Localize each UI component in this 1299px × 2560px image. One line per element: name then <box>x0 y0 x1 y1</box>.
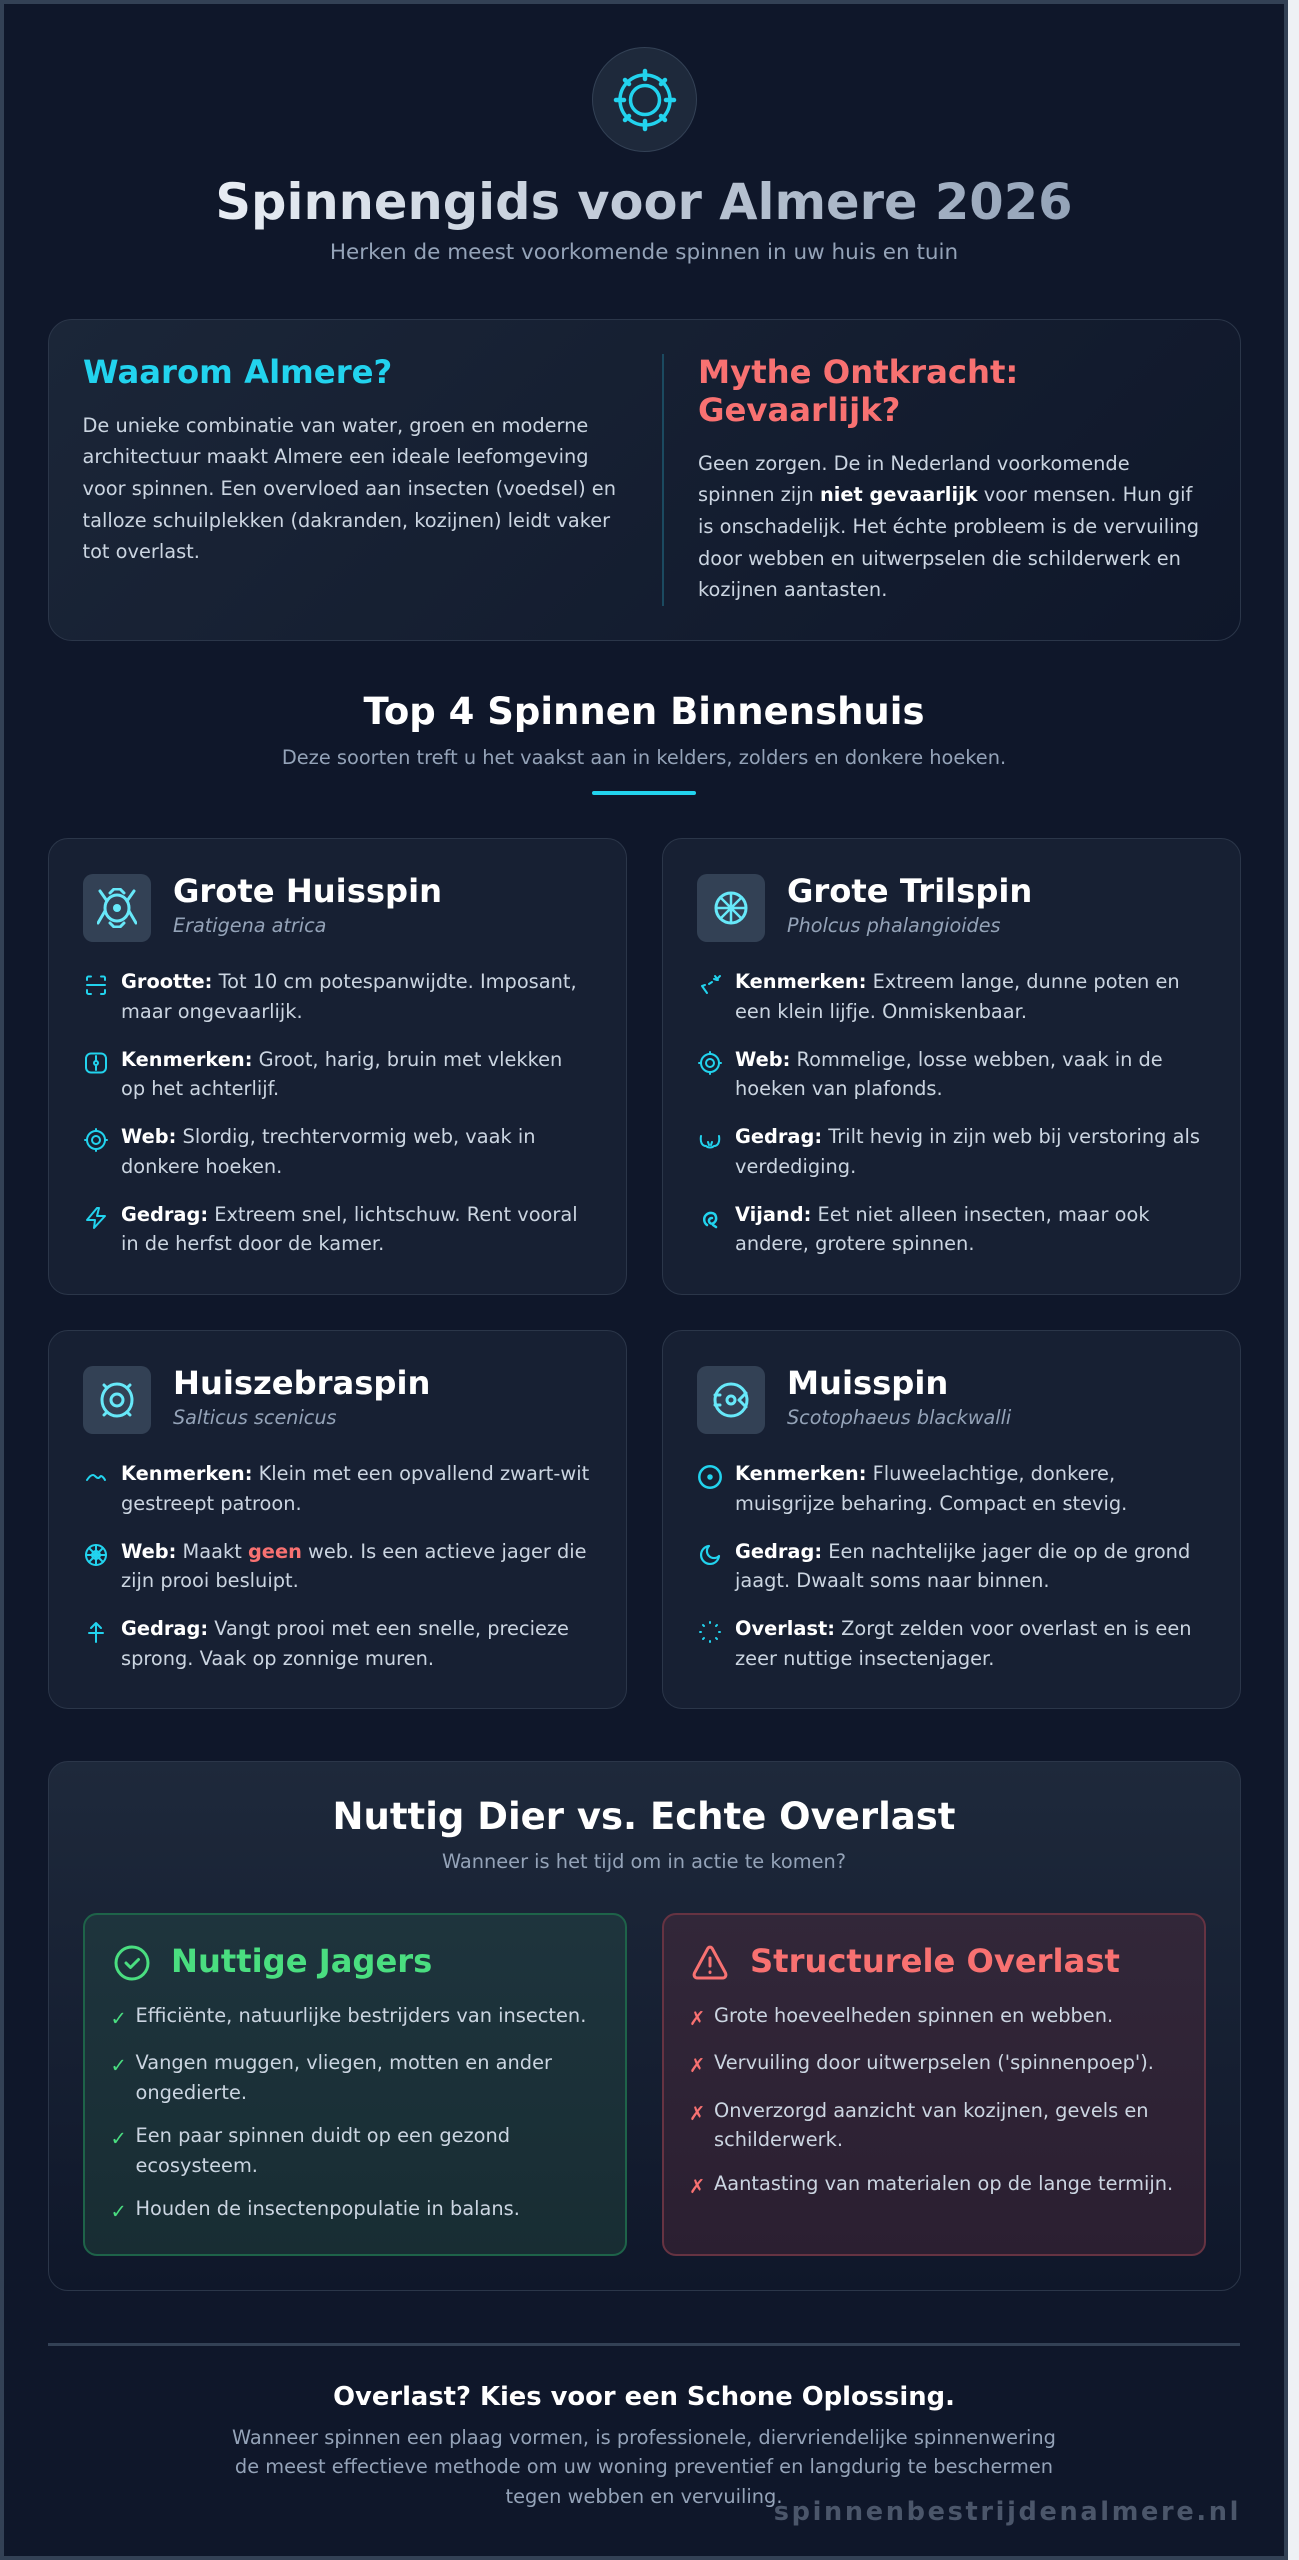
box: nuttige jagers: ✓ <box>110 2007 127 2030</box>
item: gedrag <box>700 1540 1190 1592</box>
box: structurele overlast: ✗ <box>689 2054 705 2077</box>
list item: Efficiënte, natuurlijke bestrijders van insecten. <box>136 2004 586 2027</box>
list item: Aantasting van materialen op de lange termijn. <box>714 2172 1173 2194</box>
list item: Grote hoeveelheden spinnen en webben. <box>714 2004 1113 2027</box>
icon box: trilspin <box>697 874 765 942</box>
item: gedrag <box>700 1125 1200 1178</box>
item: grootte: maar ongevaarlijk. <box>121 1000 303 1023</box>
list item: Een paar spinnen duidt op een gezond <box>136 2124 510 2147</box>
item: gedrag: Gedrag: Een nachtelijke jager die op de grond <box>735 1540 1190 1562</box>
item: kenmerken <box>86 1462 589 1515</box>
text: waarom almere: tot overlast. <box>82 540 200 563</box>
item: vijand: andere, grotere spinnen. <box>735 1232 974 1255</box>
footer heading: Overlast? Kies voor een Schone Oplossing. <box>333 2382 955 2412</box>
list item <box>689 2098 1149 2151</box>
item: grootte <box>86 970 577 1023</box>
list item <box>110 2051 552 2104</box>
heading: mythe ontkracht: Mythe Ontkracht: <box>698 353 1018 391</box>
text: waarom almere: architectuur maakt Almere een ideale leefomgeving <box>82 445 589 468</box>
item: gedrag: Gedrag: Extreem snel, lichtschuw. Rent vooral <box>121 1202 578 1226</box>
icon: warning triangle <box>692 1946 728 1980</box>
title: Spinnengids voor Almere 2026 <box>215 173 1073 231</box>
text: mythe ontkracht: is onschadelijk. Het échte probleem is de vervuiling <box>698 515 1199 538</box>
text: waarom almere: talloze schuilplekken (dakranden, kozijnen) leidt vaker <box>82 509 610 532</box>
text: mythe ontkracht: Geen zorgen. De in Nederland voorkomende <box>698 452 1130 474</box>
card: huiszebraspin <box>48 1330 626 1709</box>
item: web <box>85 1540 587 1592</box>
item: web: Web: Maakt geen web. Is een actieve jager die <box>121 1540 587 1562</box>
box: structurele overlast: ✗ <box>689 2102 705 2124</box>
header emblem <box>592 47 697 152</box>
text: waarom almere <box>82 414 616 563</box>
footer text: tegen webben en vervuiling. <box>505 2485 782 2508</box>
card: grote trilspin <box>662 838 1240 1295</box>
item: gedrag: Gedrag: Trilt hevig in zijn web bij verstoring als <box>735 1125 1200 1148</box>
item: kenmerken <box>698 1462 1127 1515</box>
text: mythe ontkracht: spinnen zijn niet gevaarlijk voor mensen. Hun gif <box>698 483 1192 506</box>
item: gedrag: jaagt. Dwaalt soms naar binnen. <box>735 1569 1050 1592</box>
item: gedrag <box>86 1202 578 1255</box>
footer text: Wanneer spinnen een plaag vormen, is professionele, diervriendelijke spinnenwering <box>232 2426 1056 2448</box>
box: nuttige jagers <box>83 1913 627 2256</box>
item: gedrag <box>88 1617 569 1670</box>
heading: waarom almere: Waarom Almere? <box>83 353 392 391</box>
icon: spider web target <box>614 68 676 132</box>
item: kenmerken <box>701 970 1180 1023</box>
item: kenmerken: gestreept patroon. <box>121 1492 302 1515</box>
item: web: Web: Slordig, trechtervormig web, vaak in <box>121 1125 536 1148</box>
item: web: Web: Rommelige, losse webben, vaak in de <box>735 1048 1163 1070</box>
species name: Grote Huisspin <box>173 872 442 910</box>
item: web: zijn prooi besluipt. <box>121 1569 299 1592</box>
item: kenmerken: muisgrijze beharing. Compact en stevig. <box>735 1492 1127 1515</box>
list item: ecosysteem. <box>136 2154 258 2177</box>
footer text: de meest effectieve methode om uw woning preventief en langdurig te beschermen <box>235 2455 1053 2478</box>
item: kenmerken: Kenmerken: Groot, harig, bruin met vlekken <box>121 1048 562 1070</box>
latin name: Eratigena atrica <box>173 914 326 937</box>
heading: mythe ontkracht <box>698 353 1018 429</box>
latin name: Pholcus phalangioides <box>787 914 1001 937</box>
section heading: top 4: Top 4 Spinnen Binnenshuis <box>364 690 924 733</box>
text: mythe ontkracht: door webben en uitwerpselen die schilderwerk en <box>698 547 1181 570</box>
latin name: Scotophaeus blackwalli <box>787 1406 1011 1429</box>
heading: nuttige jagers: Nuttige Jagers <box>171 1942 432 1980</box>
species name: Grote Trilspin <box>787 872 1032 910</box>
list item: Houden de insectenpopulatie in balans. <box>136 2197 520 2220</box>
section heading: Nuttig Dier vs. Echte Overlast <box>333 1795 955 1838</box>
panel: intro <box>48 319 1240 641</box>
card: grote huisspin <box>48 838 626 1295</box>
icon box: muisspin <box>697 1366 765 1434</box>
box: structurele overlast: ✗ <box>689 2174 705 2198</box>
item: overlast: Overlast: Zorgt zelden voor overlast en is een <box>735 1617 1192 1640</box>
box: structurele overlast: ✗ <box>689 2007 705 2030</box>
icon box: zebraspin <box>83 1366 151 1434</box>
item: vijand <box>703 1202 1150 1255</box>
list item: Onverzorgd aanzicht van kozijnen, gevels en <box>714 2098 1149 2122</box>
list item <box>110 2124 510 2177</box>
item: kenmerken: een klein lijfje. Onmiskenbaar. <box>735 1000 1027 1023</box>
species name: Huiszebraspin <box>173 1364 430 1402</box>
card: muisspin <box>662 1330 1240 1709</box>
icon: check circle <box>114 1946 150 1980</box>
heading: structurele overlast: Structurele Overlast <box>750 1942 1120 1980</box>
section subtitle: top 4: Deze soorten treft u het vaakst aan in kelders, zolders en donkere hoeken. <box>282 746 1006 769</box>
item: gedrag: in de herfst door de kamer. <box>121 1232 384 1255</box>
item: web: donkere hoeken. <box>121 1155 282 1178</box>
list item: ongedierte. <box>136 2081 247 2104</box>
item: overlast: zeer nuttige insectenjager. <box>735 1647 994 1670</box>
text: waarom almere: voor spinnen. Een overvloed aan insecten (voedsel) en <box>82 477 616 500</box>
item: grootte: Grootte: Tot 10 cm potespanwijdte. Imposant, <box>121 970 577 993</box>
footer text <box>232 2426 1056 2508</box>
item: web <box>84 1125 536 1178</box>
heading: mythe ontkracht: Gevaarlijk? <box>698 391 900 429</box>
text: mythe ontkracht: kozijnen aantasten. <box>698 578 887 601</box>
text: waarom almere: De unieke combinatie van water, groen en moderne <box>82 414 588 436</box>
item: kenmerken: op het achterlijf. <box>121 1077 279 1100</box>
box: nuttige jagers: ✓ <box>110 2054 127 2077</box>
species name: Muisspin <box>787 1364 948 1402</box>
item: gedrag: Gedrag: Vangt prooi met een snelle, precieze <box>121 1617 569 1640</box>
subtitle: Herken de meest voorkomende spinnen in uw huis en tuin <box>330 240 958 265</box>
accent underline <box>592 791 696 795</box>
box: nuttige jagers: ✓ <box>110 2127 127 2150</box>
item: kenmerken: Kenmerken: Klein met een opvallend zwart-wit <box>121 1462 589 1485</box>
box: nuttige jagers: ✓ <box>110 2200 127 2223</box>
text: mythe ontkracht <box>698 452 1199 601</box>
icon box: huisspin <box>83 874 151 942</box>
item: web <box>698 1048 1163 1100</box>
watermark domain: spinnenbestrijdenalmere.nl <box>774 2497 1241 2527</box>
item: vijand: Vijand: Eet niet alleen insecten, maar ook <box>735 1202 1150 1226</box>
item: kenmerken <box>85 1048 562 1100</box>
item: kenmerken: Kenmerken: Fluweelachtige, donkere, <box>735 1462 1115 1485</box>
latin name: Salticus scenicus <box>173 1406 336 1429</box>
list item: Vervuiling door uitwerpselen ('spinnenpoep'). <box>714 2051 1154 2074</box>
panel: nuttig vs overlast <box>48 1761 1240 2291</box>
item: kenmerken: Kenmerken: Extreem lange, dunne poten en <box>735 970 1180 993</box>
section subtitle: Wanneer is het tijd om in actie te komen? <box>442 1850 846 1872</box>
box: structurele overlast <box>662 1913 1206 2256</box>
item: gedrag: verdediging. <box>735 1155 856 1178</box>
list item: schilderwerk. <box>714 2128 843 2151</box>
item: gedrag: sprong. Vaak op zonnige muren. <box>121 1647 434 1670</box>
item: overlast <box>699 1617 1192 1670</box>
item: web: hoeken van plafonds. <box>735 1077 943 1100</box>
list item: Vangen muggen, vliegen, motten en ander <box>136 2051 552 2074</box>
